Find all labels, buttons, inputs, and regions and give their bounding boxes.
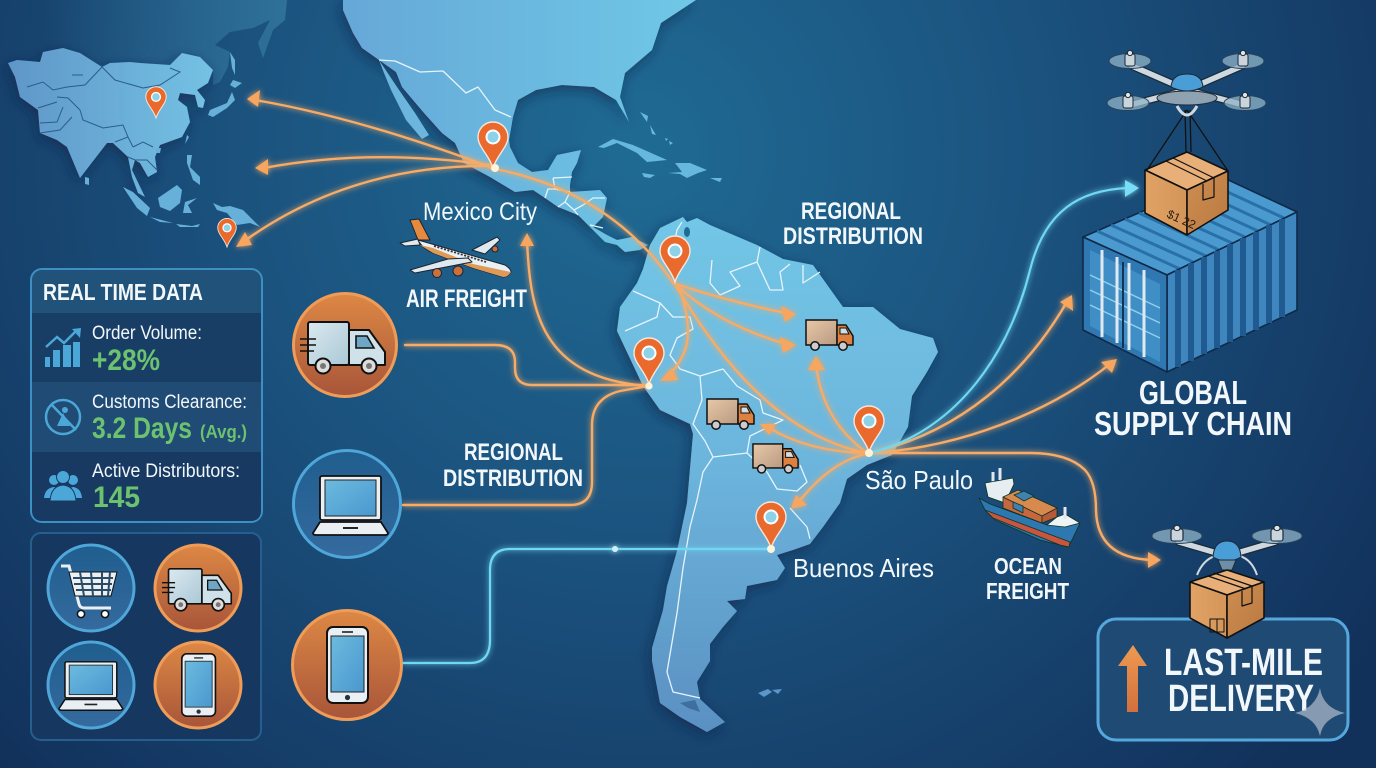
map: asian islands — [85, 52, 260, 227]
label: regional distribution top: DISTRIBUTION — [783, 223, 923, 250]
label: regional distribution top: REGIONAL — [801, 198, 901, 225]
metric: order volume: Order Volume: — [92, 323, 202, 344]
map: north america — [343, 0, 696, 252]
metric: customs clearance: (Avg.) — [200, 422, 247, 442]
metric: customs clearance: Customs Clearance: — [92, 392, 247, 413]
icon: container ship — [979, 468, 1080, 547]
icon: delivery drone with box — [1152, 525, 1302, 638]
label: global supply chain: GLOBAL — [1139, 374, 1247, 411]
icon: large truck circle — [294, 294, 396, 396]
truck icon: north brazil — [806, 320, 853, 350]
metric: customs clearance — [92, 392, 247, 445]
routes: orange glowing — [236, 90, 1161, 568]
icon: sparkle watermark — [1295, 688, 1345, 736]
pin: peru — [634, 338, 664, 390]
map trucks — [707, 320, 853, 473]
label: regional distribution left: DISTRIBUTION — [443, 465, 583, 492]
map: tierra del fuego — [680, 700, 700, 712]
pin: buenos aires — [756, 502, 786, 553]
map: south american borders — [625, 222, 820, 698]
panel: channel icons — [31, 533, 261, 740]
metric: active distributors — [92, 461, 240, 514]
icon: cardboard box on container: $1 22 — [1165, 207, 1198, 232]
truck icon: paraguay — [753, 444, 798, 473]
arrowheads: orange — [236, 90, 1161, 568]
icon: large phone circle — [292, 610, 402, 720]
heading: real time data: REAL TIME DATA — [43, 279, 203, 305]
pin: china — [146, 87, 166, 118]
metric: order volume: +28% — [92, 344, 160, 377]
icon: smartphone — [155, 642, 241, 728]
icon: distributors — [44, 470, 82, 501]
metric: customs clearance: 3.2 Days — [92, 412, 192, 445]
label: last-mile delivery: DELIVERY — [1168, 678, 1314, 720]
label: ocean freight: FREIGHT — [986, 578, 1069, 604]
map: falkland islands — [758, 689, 782, 697]
icon: shopping cart — [48, 545, 134, 631]
label: regional distribution top — [783, 198, 923, 250]
label: ocean freight: OCEAN — [994, 553, 1062, 579]
pin: são paulo — [854, 406, 884, 457]
map: baja california — [379, 60, 429, 139]
label: regional distribution left — [443, 439, 583, 492]
label: ocean freight — [986, 553, 1069, 604]
pin: mexico city — [478, 122, 508, 172]
metric: active distributors: 145 — [93, 481, 140, 514]
map: south america — [617, 217, 938, 732]
label: mexico city: Mexico City — [423, 198, 537, 226]
icon: large laptop circle — [294, 450, 400, 558]
label: last-mile delivery: LAST-MILE — [1164, 642, 1323, 684]
label: regional distribution left: REGIONAL — [464, 439, 563, 466]
pin: colombia — [660, 236, 690, 282]
panel: last-mile delivery — [1098, 619, 1348, 740]
icon: airplane — [400, 219, 511, 278]
map: asia mainland — [8, 48, 213, 197]
icon: delivery truck — [155, 545, 241, 631]
map pins — [146, 87, 884, 553]
label: são paulo: São Paulo — [865, 465, 973, 495]
map: asian borders — [27, 45, 180, 170]
map: northern asia — [0, 0, 287, 85]
icon: up arrow — [1118, 645, 1147, 712]
pin: indonesia — [218, 218, 236, 247]
icon: shipping container — [1083, 177, 1297, 372]
icon: cardboard box on container — [1145, 152, 1228, 235]
map: lake maracaibo — [684, 227, 690, 237]
icon: hoisting drone — [1107, 50, 1266, 171]
icon: growth chart — [45, 328, 81, 367]
world map — [0, 0, 938, 732]
truck icon: bolivia — [707, 399, 754, 429]
label: buenos aires: Buenos Aires — [793, 553, 934, 583]
icon: laptop — [48, 642, 134, 728]
icon: customs prohibited — [46, 400, 80, 434]
panel: real time data — [31, 269, 262, 522]
map: mexico and central america borders — [379, 60, 605, 228]
label: last-mile delivery — [1164, 642, 1323, 720]
label: air freight: AIR FREIGHT — [406, 285, 527, 313]
label: global supply chain: SUPPLY CHAIN — [1094, 405, 1292, 442]
metric: order volume — [92, 323, 202, 377]
map: caribbean islands — [598, 112, 722, 182]
label: global supply chain — [1094, 374, 1292, 442]
route lines — [236, 90, 1161, 663]
metric: active distributors: Active Distributors: — [92, 461, 240, 482]
routes: cyan glowing — [403, 180, 1139, 663]
